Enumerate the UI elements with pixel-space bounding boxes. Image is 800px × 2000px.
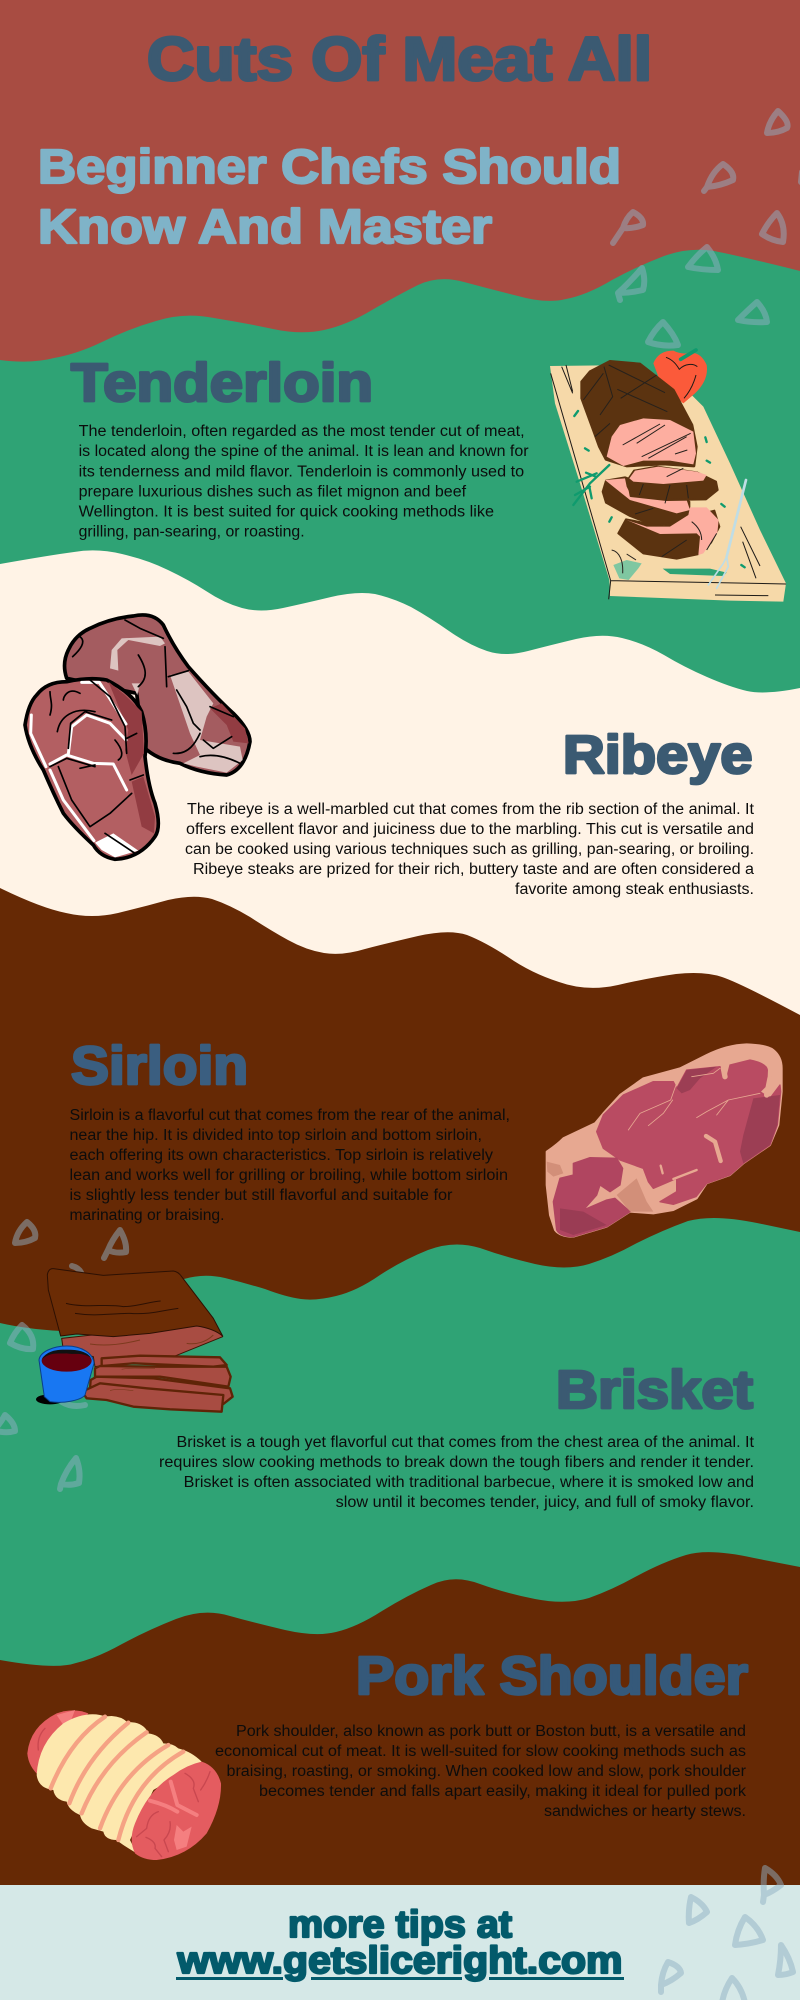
text block: tenderloin description xyxy=(79,423,529,540)
decoration: triangle doodles, footer xyxy=(661,1868,793,2000)
text block: ribeye description: can be cooked using various techniques such as grilling, pan-searing, or broiling. xyxy=(185,841,754,858)
text block: brisket description: requires slow cooking methods to break down the tough fibers and render it tender. xyxy=(159,1454,754,1471)
text block: sirloin description: marinating or braising. xyxy=(70,1207,224,1224)
subtitle: Know And Master xyxy=(38,201,492,254)
text block: pork shoulder description xyxy=(215,1723,746,1820)
title: Cuts Of Meat All xyxy=(147,25,652,93)
panel: tenderloin xyxy=(71,350,786,602)
text block: sirloin description: lean and works well for grilling or broiling, while bottom sirloin xyxy=(70,1167,508,1184)
text block: sirloin description: Sirloin is a flavorful cut that comes from the rear of the animal, xyxy=(70,1107,510,1124)
text block: brisket description: Brisket is a tough yet flavorful cut that comes from the chest area of the animal. It xyxy=(176,1434,755,1451)
text block: tenderloin description: The tenderloin, often regarded as the most tender cut of meat, xyxy=(79,423,525,440)
subtitle xyxy=(38,141,621,254)
heading: tenderloin: Tenderloin xyxy=(71,353,373,413)
icon: two raw ribeye steaks xyxy=(25,615,250,859)
text block: pork shoulder description: becomes tender and falls apart easily, making it ideal for pulled pork xyxy=(259,1783,746,1800)
panel: sirloin xyxy=(70,1036,782,1237)
subtitle: Beginner Chefs Should xyxy=(38,141,621,194)
text block: pork shoulder description: economical cut of meat. It is well-suited for slow cooking methods such as xyxy=(215,1743,746,1760)
text block: pork shoulder description: Pork shoulder, also known as pork butt or Boston butt, is a versatile and xyxy=(236,1723,746,1740)
text block: tenderloin description: Wellington. It is best suited for quick cooking methods like xyxy=(79,504,494,520)
text block: brisket description: Brisket is often associated with traditional barbecue, where it is smoked low and xyxy=(184,1474,754,1491)
heading: brisket: Brisket xyxy=(556,1360,753,1420)
text block: ribeye description: offers excellent flavor and juiciness due to the marbling. This cut is versatile and xyxy=(186,821,754,838)
icon: roast tenderloin on cutting board xyxy=(550,350,786,602)
text block: sirloin description xyxy=(70,1107,510,1224)
text block: tenderloin description: prepare luxurious dishes such as filet mignon and beef xyxy=(79,484,467,500)
text block: pork shoulder description: braising, roasting, or smoking. When cooked low and slow, pork shoulder xyxy=(226,1763,746,1780)
heading: sirloin: Sirloin xyxy=(71,1036,248,1096)
panel: brisket xyxy=(36,1269,755,1511)
heading: ribeye: Ribeye xyxy=(563,725,752,785)
decoration: scattered triangle doodles, top xyxy=(613,111,800,346)
panel: pork shoulder xyxy=(27,1646,748,1860)
heading: pork shoulder: Pork Shoulder xyxy=(356,1646,748,1706)
text block: tenderloin description: grilling, pan-searing, or roasting. xyxy=(79,524,305,540)
icon: sirloin steak xyxy=(547,1044,782,1237)
text block: ribeye description: Ribeye steaks are prized for their rich, buttery taste and are often considered a xyxy=(193,861,754,878)
text block: brisket description xyxy=(159,1434,755,1511)
text block: sirloin description: each offering its own characteristics. Top sirloin is relatively xyxy=(70,1147,493,1164)
panel: ribeye xyxy=(25,615,755,898)
text block: ribeye description: The ribeye is a well-marbled cut that comes from the rib section of the animal. It xyxy=(187,801,755,818)
text block: ribeye description xyxy=(185,801,755,898)
text block: pork shoulder description: sandwiches or hearty stews. xyxy=(544,1803,746,1820)
icon: sliced brisket with sauce cup xyxy=(36,1269,233,1412)
footer text: more tips at: more tips at xyxy=(288,1904,512,1946)
text block: tenderloin description: is located along the spine of the animal. It is lean and known for xyxy=(79,443,529,460)
panel: footer xyxy=(0,1868,800,2000)
text block: sirloin description: near the hip. It is divided into top sirloin and bottom sirloin, xyxy=(70,1127,482,1144)
text block: sirloin description: is slightly less tender but still flavorful and suitable for xyxy=(70,1187,452,1204)
footer link: website: www.getsliceright.com xyxy=(176,1940,623,1982)
text block: tenderloin description: its tenderness and mild flavor. Tenderloin is commonly used to xyxy=(79,464,524,480)
text block: ribeye description: favorite among steak enthusiasts. xyxy=(515,881,754,898)
text block: brisket description: slow until it becomes tender, juicy, and full of smoky flavor. xyxy=(336,1494,754,1511)
icon: tied pork shoulder roast xyxy=(27,1710,221,1860)
decoration: triangle doodles, left middle xyxy=(0,1222,126,1489)
